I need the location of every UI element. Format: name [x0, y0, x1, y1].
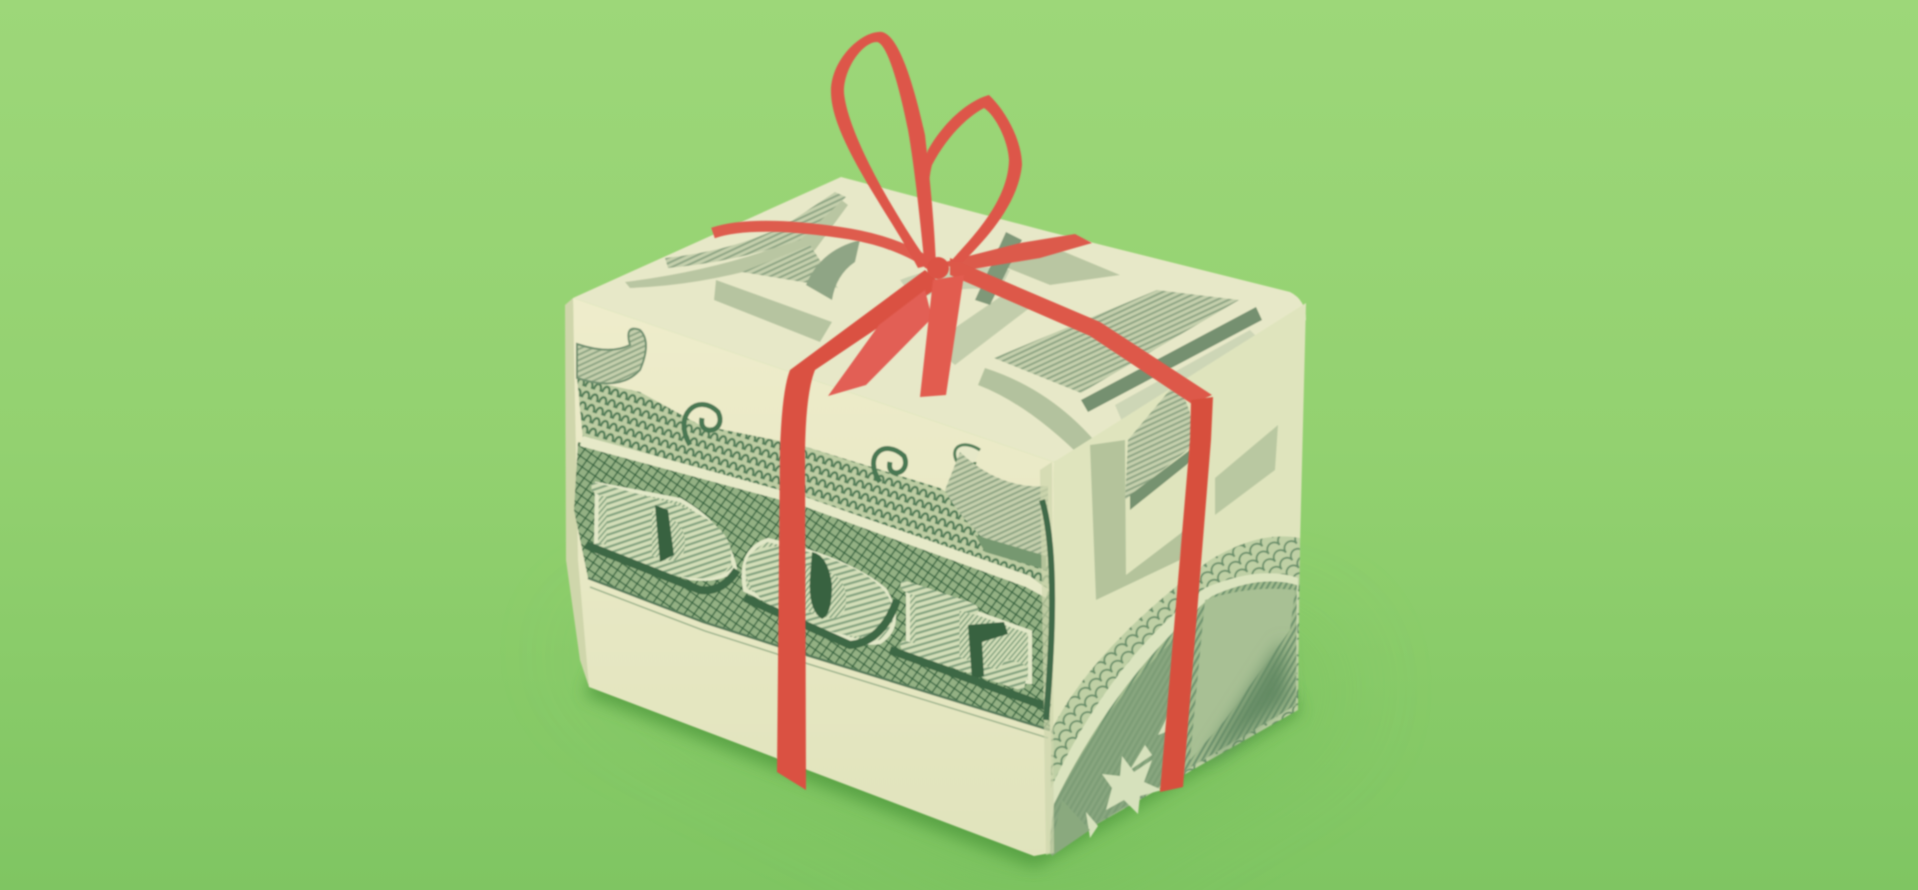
ribbon: tall loop [831, 32, 936, 268]
ribbon: tail one [828, 290, 932, 396]
ribbon: left vertical band with diagonal [777, 270, 942, 790]
shell ornament [945, 452, 1048, 560]
left scroll [577, 329, 646, 383]
ribbon: knot [927, 257, 949, 279]
banknote letters: O [744, 514, 895, 668]
ribbon: right horizontal band [945, 234, 1092, 272]
ribbon: tail two [920, 275, 964, 397]
banknote letters [596, 464, 1028, 710]
banknote letters: L [905, 562, 1028, 710]
ribbon: right band to vertical [950, 258, 1212, 404]
letter shadow line [586, 545, 1050, 708]
ribbon: horizontal band [713, 226, 935, 268]
box front face [565, 298, 1054, 856]
dark letter slits [655, 505, 674, 562]
red ribbon [713, 32, 1213, 792]
laurel sprig [1086, 712, 1176, 838]
ribbon: right vertical band [1160, 397, 1213, 792]
box top face [573, 177, 1306, 470]
soft cast shadow [560, 640, 1340, 880]
spiral scrolls [684, 404, 720, 445]
banknote letters: D [596, 464, 733, 608]
gift box [565, 177, 1306, 856]
letter backing shapes [596, 484, 1030, 682]
box right face [1048, 303, 1306, 856]
ornament row [577, 378, 1050, 590]
lattice band [574, 442, 1050, 730]
lower thin line [588, 578, 1050, 730]
ribbon: short loop [921, 95, 1022, 268]
